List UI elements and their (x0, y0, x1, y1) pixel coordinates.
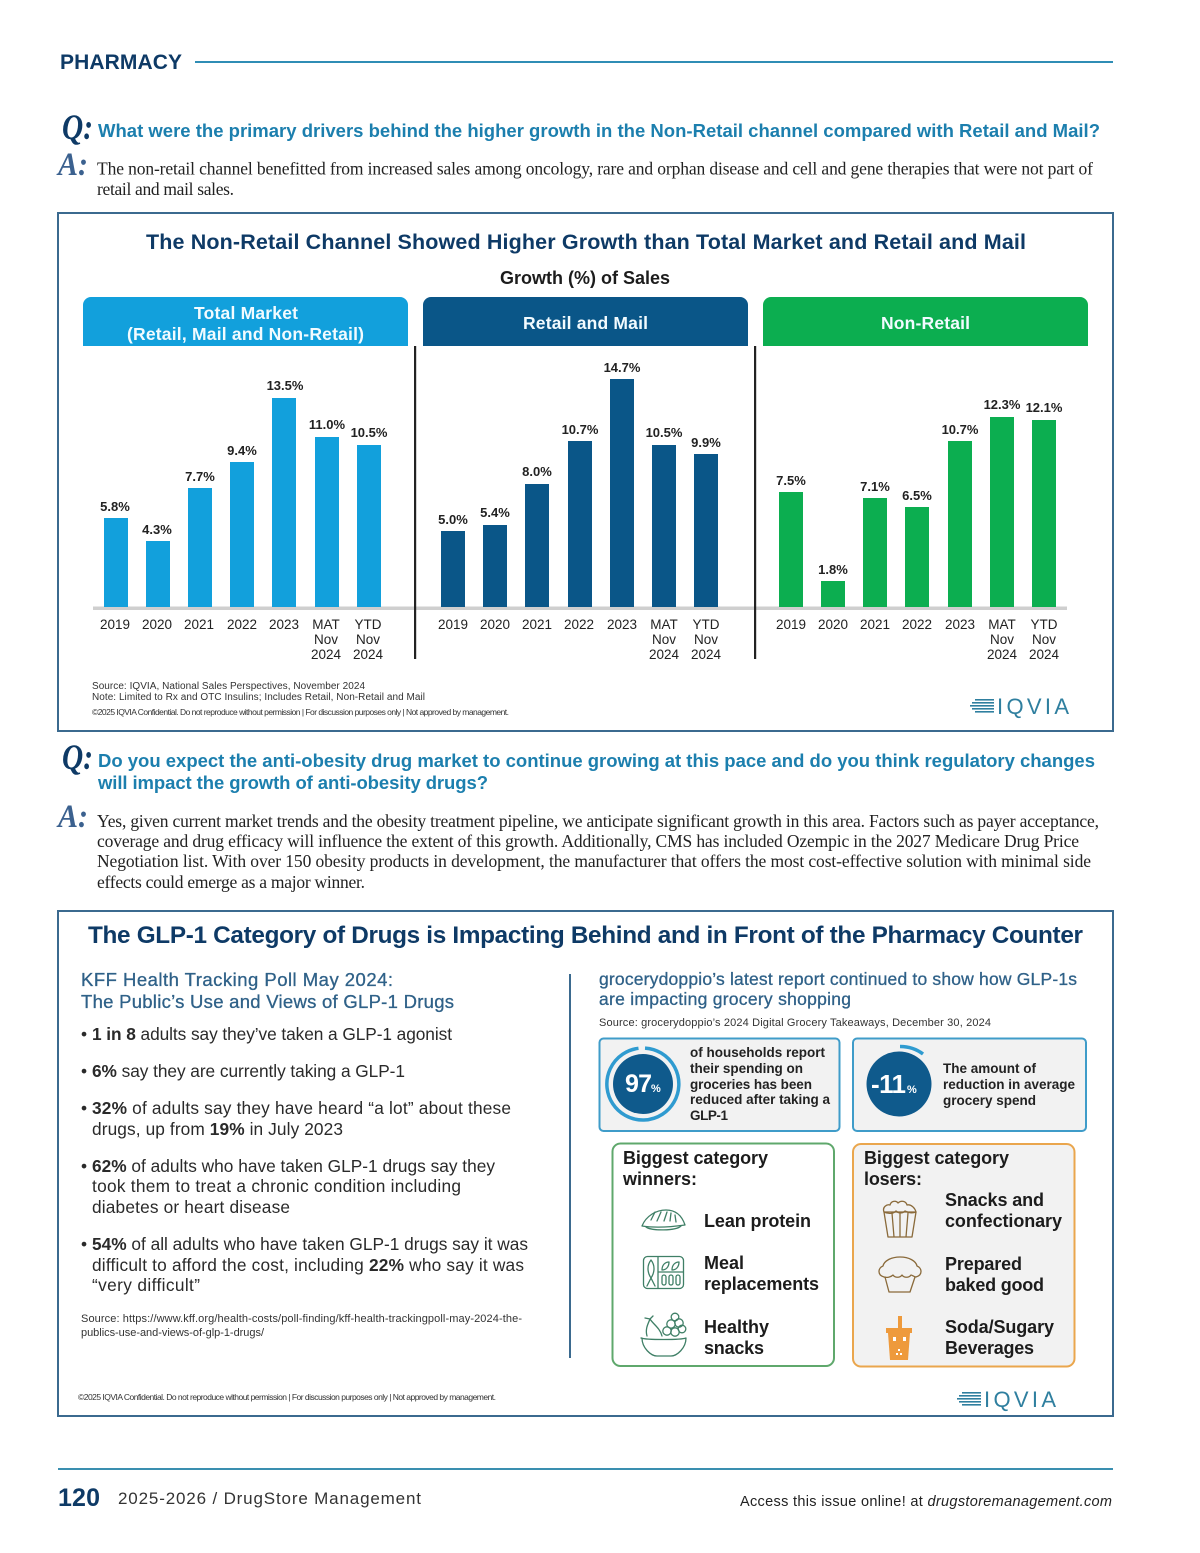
bar chart: non-retail: Nov (990, 632, 1014, 647)
bar chart: total market (100, 378, 388, 662)
KFF bullet list: 1 in 8 adults say they’ve taken a GLP-1 agonist (92, 1024, 452, 1044)
card: category losers: Snacks and (945, 1190, 1044, 1210)
stat card: 97%: -11 (871, 1071, 906, 1099)
icon: muffin (879, 1257, 921, 1292)
bar chart: non-retail: MAT (988, 617, 1016, 632)
KFF bullet list: 6% say they are currently taking a GLP-1 (92, 1061, 405, 1081)
answer 1: The non-retail channel benefitted from increased sales among oncology, rare and orphan disease and cell and gene therapies that were not part of (97, 158, 1093, 178)
bar chart: retail and mail: 10.5% (646, 425, 683, 440)
KFF bullet list: 54% of all adults who have taken GLP-1 drugs say it was (92, 1234, 528, 1254)
page footer (58, 1484, 1112, 1512)
bar chart: non-retail: 7.1% (860, 479, 890, 494)
stat card: 97%: GLP-1 (690, 1108, 728, 1123)
answer 2: coverage and drug efficacy will influence the extent of this growth. Additionally, CMS has included Ozempic in the 2027 Medicare Drug Price (97, 831, 1079, 851)
stat card: 97%: % (651, 1083, 661, 1095)
column header: non-retail: Non-Retail (881, 313, 970, 333)
bar chart: retail and mail (438, 360, 722, 662)
bar chart: total market: 11.0% (309, 417, 346, 432)
question 2: will impact the growth of anti-obesity drugs? (97, 772, 488, 793)
KFF poll heading: The Public’s Use and Views of GLP-1 Drugs (81, 991, 454, 1012)
bar chart: non-retail: 1.8% (818, 562, 848, 577)
answer 2 (56, 799, 1099, 892)
KFF bullet list: • (81, 1061, 87, 1081)
card: category losers: confectionary (945, 1211, 1062, 1231)
panel: GLP-1 category (58, 911, 1113, 1416)
bar chart: non-retail: 2024 (1029, 647, 1060, 662)
icon: meal tray (644, 1256, 684, 1288)
card: category winners: Healthy (704, 1317, 769, 1337)
bar chart: total market: 10.5% (351, 425, 388, 440)
bar chart: retail and mail: 8.0% (522, 464, 552, 479)
stat card: 97%: of households report (690, 1045, 826, 1060)
answer 1: A: (56, 147, 88, 183)
bar chart: retail and mail: 2024 (649, 647, 680, 662)
chart source note: ©2025 IQVIA Confidential. Do not reproduce without permission | For discussion purposes only | Not approved by management. (92, 707, 509, 717)
card: category losers: Soda/Sugary (945, 1317, 1054, 1337)
card: category winners: snacks (704, 1338, 764, 1358)
stat card: -11% (853, 1038, 1086, 1131)
bar chart: non-retail: YTD (1030, 617, 1058, 632)
card: category winners: Lean protein (704, 1211, 811, 1231)
card: category losers: Prepared (945, 1254, 1022, 1274)
bar chart: non-retail: 12.3% (984, 397, 1021, 412)
bar chart: retail and mail: Nov (694, 632, 718, 647)
page footer: 2025-2026 / DrugStore Management (118, 1489, 421, 1508)
KFF source: publics-use-and-views-of-glp-1-drugs/ (81, 1327, 265, 1339)
answer 1: retail and mail sales. (97, 179, 234, 199)
column header: total market (83, 297, 408, 346)
bar chart: total market: 2022 (227, 617, 257, 632)
card: category losers: Beverages (945, 1338, 1034, 1358)
bar chart: total market: 2023 (269, 617, 299, 632)
bar chart: retail and mail: 9.9% (691, 435, 721, 450)
page footer: Access this issue online! at drugstoremanagement.com (740, 1494, 1112, 1510)
KFF bullet list: took them to treat a chronic condition including (92, 1176, 461, 1196)
KFF bullet list: drugs, up from 19% in July 2023 (92, 1119, 343, 1139)
card: category winners: replacements (704, 1274, 819, 1294)
KFF bullet list: diabetes or heart disease (92, 1197, 290, 1217)
bar chart: non-retail: 7.5% (776, 473, 806, 488)
bar chart: retail and mail: YTD (692, 617, 720, 632)
question 1: What were the primary drivers behind the higher growth in the Non-Retail channel compared with Retail and Mail? (98, 120, 1100, 141)
answer 2: Yes, given current market trends and the obesity treatment pipeline, we anticipate significant growth in this area. Factors such as payer acceptance, (97, 811, 1099, 831)
bar chart: total market: 7.7% (185, 469, 215, 484)
card: category winners: Meal (704, 1253, 744, 1273)
grocerydoppio heading (599, 969, 1077, 1029)
KFF poll heading: KFF Health Tracking Poll May 2024: (81, 969, 393, 990)
bar chart: non-retail: 10.7% (942, 422, 979, 437)
card: category losers: Biggest category (864, 1148, 1009, 1168)
stat card: 97%: 97 (625, 1070, 652, 1098)
bar chart: non-retail: 12.1% (1026, 400, 1063, 415)
stat card: 97%: their spending on (690, 1061, 803, 1076)
card: category losers: baked good (945, 1275, 1044, 1295)
bar chart: total market: Nov (356, 632, 380, 647)
bar chart: retail and mail: 2020 (480, 617, 510, 632)
icon: fruit bowl (641, 1313, 686, 1356)
bar chart: total market: Nov (314, 632, 338, 647)
KFF poll heading (81, 969, 454, 1012)
card: category losers (853, 1144, 1074, 1366)
KFF bullet list (81, 1024, 528, 1295)
question 1: Q: (62, 107, 93, 147)
stat card: -11%: -11 (871, 1069, 906, 1099)
bar chart: retail and mail: 2021 (522, 617, 552, 632)
grocerydoppio heading: grocerydoppio’s latest report continued to show how GLP-1s (599, 969, 1077, 989)
section header: pharmacy: PHARMACY (60, 51, 182, 74)
bar chart: total market: 2019 (100, 617, 130, 632)
card: category winners (612, 1144, 834, 1366)
answer 2: A: (56, 799, 88, 835)
logo: IQVIA: IQVIA (997, 694, 1069, 719)
card: category winners: Biggest category (623, 1148, 768, 1168)
grocerydoppio heading: are impacting grocery shopping (599, 989, 851, 1009)
logo: IQVIA: IQVIA (984, 1387, 1056, 1412)
question 1 (62, 107, 1100, 147)
column header: retail and mail (423, 297, 748, 346)
chart source note (92, 681, 509, 717)
KFF source: Source: https://www.kff.org/health-costs/poll-finding/kff-health-trackingpoll-may-2024-the- (81, 1313, 522, 1325)
bar chart: total market: 13.5% (267, 378, 304, 393)
panel title: The GLP-1 Category of Drugs is Impacting Behind and in Front of the Pharmacy Counter (88, 922, 1084, 949)
bar chart: total market: YTD (354, 617, 382, 632)
stat card: 97%: groceries has been (690, 1077, 812, 1092)
bar chart: total market: MAT (312, 617, 340, 632)
KFF bullet list: • (81, 1098, 87, 1118)
column header: total market: (Retail, Mail and Non-Retail) (127, 324, 364, 344)
chart axis baseline (93, 606, 1067, 610)
KFF bullet list: difficult to afford the cost, including 22% who say it was (92, 1255, 524, 1275)
bar chart: total market: 5.8% (100, 499, 130, 514)
column header: non-retail (763, 297, 1088, 346)
bar chart: retail and mail: 14.7% (604, 360, 641, 375)
bar chart: non-retail: 2023 (945, 617, 975, 632)
bar chart: total market: 9.4% (227, 443, 257, 458)
answer 2: effects could emerge as a major winner. (97, 872, 365, 892)
bar chart: total market: 2024 (353, 647, 384, 662)
icon: soda cup (886, 1316, 912, 1360)
bar chart: total market: 4.3% (142, 522, 172, 537)
column header: retail and mail: Retail and Mail (523, 313, 648, 333)
bar chart: non-retail: 2022 (902, 617, 932, 632)
bar chart: total market: 2024 (311, 647, 342, 662)
stat card: -11%: The amount of (943, 1061, 1036, 1076)
panel: growth of sales chart (58, 213, 1113, 731)
answer 2: Negotiation list. With over 150 obesity products in development, the manufacturer that offers the most cost-effective solution with minimal side (97, 851, 1091, 871)
bar chart: total market: 2021 (184, 617, 214, 632)
bar chart: retail and mail: 5.0% (438, 512, 468, 527)
KFF source (81, 1313, 522, 1339)
bar chart: non-retail: 2020 (818, 617, 848, 632)
icon: sushi (642, 1210, 685, 1230)
bar chart: non-retail: 2019 (776, 617, 806, 632)
confidentiality note: ©2025 IQVIA Confidential. Do not reproduce without permission | For discussion purposes only | Not approved by management. (78, 1392, 496, 1402)
stat card: 97% (600, 1038, 906, 1131)
answer 1 (56, 147, 1093, 199)
bar chart: retail and mail: 2023 (607, 617, 637, 632)
bar chart: total market: 2020 (142, 617, 172, 632)
KFF bullet list: • (81, 1234, 87, 1254)
card: category winners: winners: (622, 1169, 697, 1189)
question 2: Do you expect the anti-obesity drug market to continue growing at this pace and do you think regulatory changes (98, 750, 1095, 771)
icon: popcorn (884, 1201, 916, 1237)
bar chart: retail and mail: 2024 (691, 647, 722, 662)
KFF bullet list: • (81, 1024, 87, 1044)
panel title: The Non-Retail Channel Showed Higher Growth than Total Market and Retail and Mail (146, 230, 1026, 254)
page footer: 120 (58, 1484, 100, 1512)
chart source note: Note: Limited to Rx and OTC Insulins; Includes Retail, Non-Retail and Mail (92, 692, 425, 703)
column header: total market: Total Market (194, 303, 298, 323)
bar chart: retail and mail: 10.7% (562, 422, 599, 437)
bar chart: retail and mail: 2019 (438, 617, 468, 632)
card: category losers: losers: (864, 1169, 922, 1189)
stat card: -11%: grocery spend (943, 1093, 1036, 1108)
stat card: -11%: % (907, 1084, 917, 1096)
bar chart: non-retail: Nov (1032, 632, 1056, 647)
bar chart: non-retail (776, 397, 1063, 662)
KFF bullet list: 32% of adults say they have heard “a lot” about these (92, 1098, 511, 1118)
bar chart: retail and mail: 2022 (564, 617, 594, 632)
bar chart: retail and mail: Nov (652, 632, 676, 647)
bar chart: non-retail: 2024 (987, 647, 1018, 662)
question 2: Q: (62, 737, 93, 777)
chart subtitle: Growth (%) of Sales (500, 268, 670, 288)
chart source note: Source: IQVIA, National Sales Perspectives, November 2024 (92, 681, 365, 692)
bar chart: retail and mail: 5.4% (480, 505, 510, 520)
KFF bullet list: • (81, 1156, 87, 1176)
bar chart: non-retail: 6.5% (902, 488, 932, 503)
stat card: -11%: reduction in average (943, 1077, 1075, 1092)
question 2 (62, 737, 1095, 793)
bar chart: retail and mail: MAT (650, 617, 678, 632)
KFF bullet list: “very difficult” (92, 1275, 200, 1295)
grocerydoppio heading: Source: grocerydoppio’s 2024 Digital Grocery Takeaways, December 30, 2024 (599, 1017, 991, 1029)
bar chart: non-retail: 2021 (860, 617, 890, 632)
stat card: 97%: reduced after taking a (690, 1092, 830, 1107)
KFF bullet list: 62% of adults who have taken GLP-1 drugs say they (92, 1156, 495, 1176)
